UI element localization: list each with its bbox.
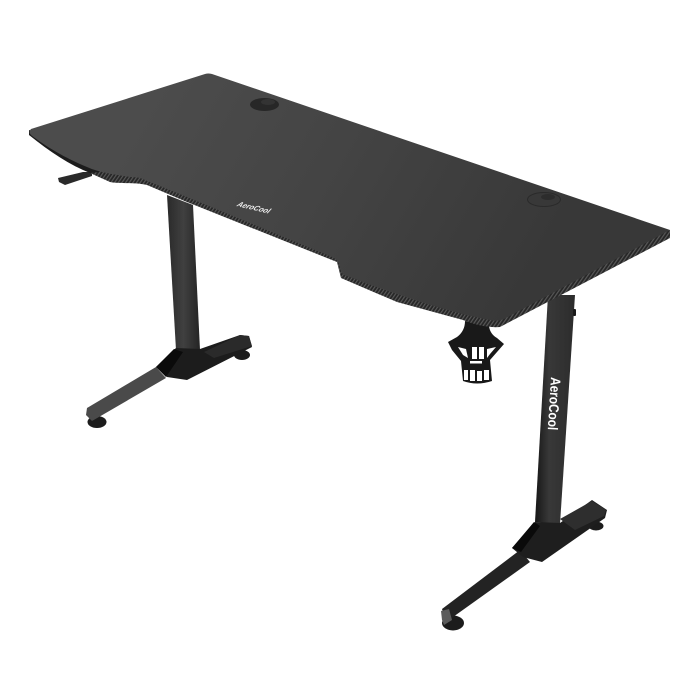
desk logo: AeroCool: [235, 201, 273, 215]
right foot housing: [512, 500, 607, 562]
left foot housing: [156, 335, 252, 380]
right leg post: [535, 295, 575, 524]
left front edge: [29, 130, 100, 173]
AeroCool leg text: AeroCool: [545, 377, 564, 431]
left rear arm: [86, 367, 166, 421]
left leg: [86, 195, 252, 428]
left leg post: [167, 195, 200, 350]
left foot pads: [88, 350, 250, 428]
left cable grommet: [250, 98, 279, 111]
height control knob: [573, 309, 576, 316]
cup holder: [448, 321, 504, 384]
right rear arm: [441, 550, 530, 625]
cup holder openings: [458, 347, 496, 381]
right foot pads: [442, 522, 604, 630]
carbon fibre edge: [90, 170, 670, 327]
right leg: [441, 295, 607, 630]
desk surface: [30, 74, 670, 321]
tabletop: [29, 74, 670, 327]
cup holder silhouette: [448, 321, 504, 384]
keyboard hook: [58, 172, 92, 185]
right cable grommet: [528, 192, 560, 206]
